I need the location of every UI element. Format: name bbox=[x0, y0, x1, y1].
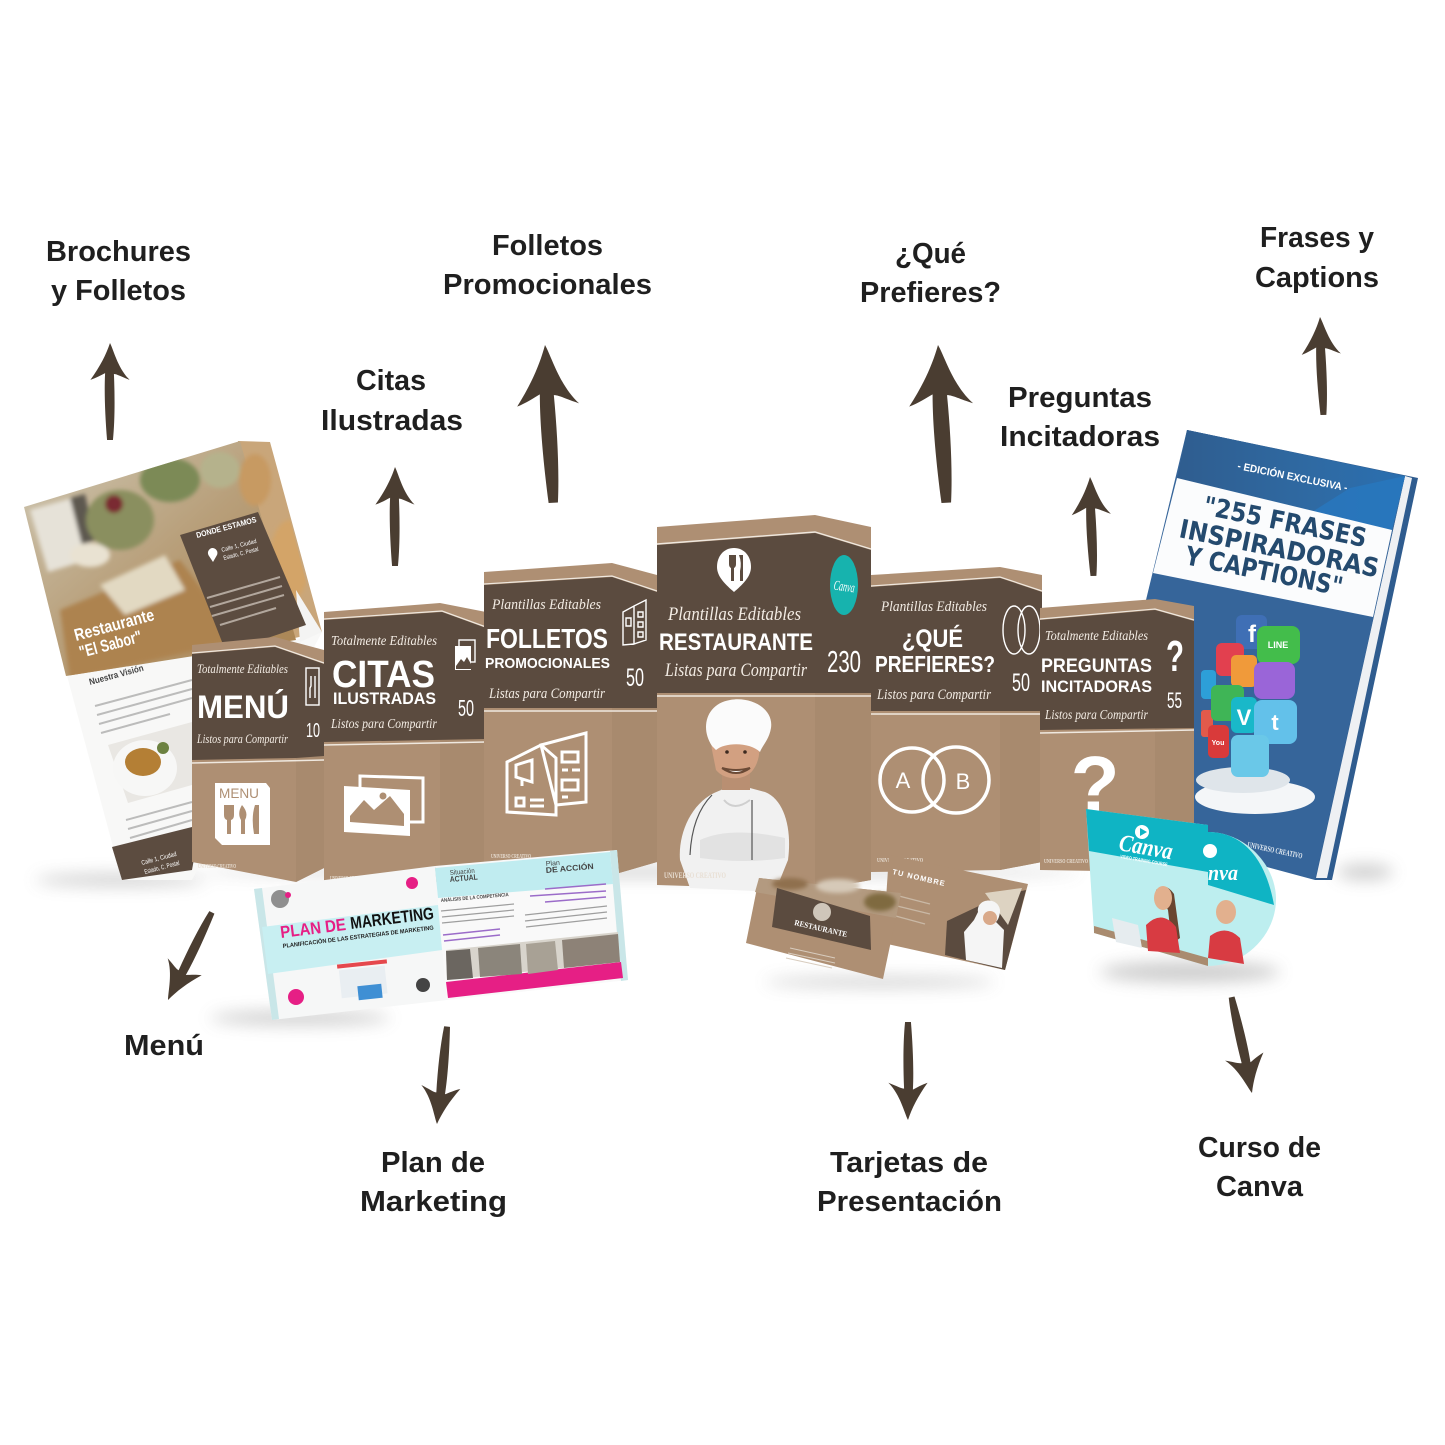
label: curso de canva: Canva bbox=[1216, 1171, 1304, 1203]
box: restaurante: Listas para Compartir bbox=[664, 660, 808, 681]
label: brochures y folletos: Brochures bbox=[46, 236, 191, 268]
icon: brochure bbox=[507, 733, 586, 815]
label: frases y captions: Frases y bbox=[1260, 222, 1374, 254]
box: folletos promocionales: PROMOCIONALES bbox=[485, 655, 610, 672]
brochure: Estado, C. Postal bbox=[223, 547, 259, 562]
label: menú: Menú bbox=[124, 1030, 204, 1062]
labels and arrows bbox=[46, 222, 1379, 1218]
box: citas ilustradas: Listos para Compartir bbox=[330, 717, 437, 732]
box: citas ilustradas: Totalmente Editables bbox=[331, 634, 437, 649]
canva course cd bbox=[1086, 809, 1276, 966]
label: plan de marketing bbox=[360, 1147, 507, 1218]
brochure: DONDE ESTAMOS bbox=[195, 515, 258, 540]
box: preguntas incitadoras: INCITADORAS bbox=[1041, 677, 1152, 696]
label: citas ilustradas bbox=[321, 365, 463, 437]
box: qué prefieres bbox=[871, 567, 1042, 872]
box: qué prefieres: PREFIERES? bbox=[875, 651, 995, 677]
marketing booklet: Plan bbox=[546, 860, 560, 868]
box: preguntas incitadoras: Listos para Compartir bbox=[1044, 708, 1148, 723]
arrow: tarjetas bbox=[888, 1022, 928, 1120]
box: folletos promocionales: Listas para Compartir bbox=[488, 686, 605, 702]
chef bbox=[680, 699, 789, 892]
brochure: Calle 1, Ciudad bbox=[221, 539, 257, 554]
arrow: frases bbox=[1300, 316, 1343, 416]
label: tarjetas de presentación bbox=[817, 1147, 1002, 1218]
arrow: folletos bbox=[514, 343, 584, 504]
icon: fork and knife pin bbox=[717, 548, 751, 592]
brochure: Restaurante bbox=[72, 605, 156, 645]
box: restaurante bbox=[657, 515, 871, 892]
social media icons: You bbox=[1212, 740, 1224, 747]
box: folletos promocionales: Plantillas Editables bbox=[491, 597, 601, 613]
box: menú: UNIVERSO CREATIVO bbox=[198, 864, 236, 870]
arrow: curso de canva bbox=[1212, 993, 1271, 1097]
marketing booklet: PLAN DE bbox=[279, 915, 347, 942]
arrow: plan de marketing bbox=[418, 1025, 467, 1126]
label: folletos promocionales bbox=[443, 230, 652, 301]
box: folletos promocionales: 50 bbox=[626, 664, 644, 692]
marketing booklet: MARKETING bbox=[349, 904, 435, 933]
box: preguntas incitadoras: UNIVERSO CREATIVO bbox=[1044, 859, 1088, 865]
box: qué prefieres: 50 bbox=[1012, 669, 1030, 697]
icon: A B circles: A bbox=[896, 768, 911, 793]
social media icons bbox=[1195, 615, 1315, 814]
book: 255 frases: INSPIRADORAS bbox=[1177, 514, 1382, 584]
box: qué prefieres: Plantillas Editables bbox=[880, 599, 987, 615]
arrow: brochures bbox=[90, 343, 130, 440]
brochure: Estado, C. Postal bbox=[144, 860, 181, 876]
business cards bbox=[746, 855, 1028, 979]
label: citas ilustradas: Ilustradas bbox=[321, 405, 463, 437]
brochure: Calle 1, Ciudad bbox=[141, 851, 178, 867]
icon: A B circles: B bbox=[956, 769, 970, 794]
box: folletos promocionales: FOLLETOS bbox=[486, 623, 608, 654]
box: menú: Totalmente Editables bbox=[197, 661, 288, 676]
icon: menu: MENU bbox=[219, 785, 259, 801]
label: preguntas incitadoras: Incitadoras bbox=[1000, 421, 1160, 453]
box: preguntas incitadoras bbox=[1040, 599, 1194, 872]
arrow: qué prefieres bbox=[906, 343, 978, 504]
social media icons: LINE bbox=[1268, 640, 1288, 650]
book: 255 frases: - EDICIÓN EXCLUSIVA - bbox=[1236, 459, 1349, 494]
label: citas ilustradas: Citas bbox=[356, 365, 426, 397]
label: plan de marketing: Marketing bbox=[360, 1186, 507, 1218]
marketing booklet bbox=[254, 850, 628, 1020]
label: plan de marketing: Plan de bbox=[381, 1147, 485, 1179]
box: qué prefieres: UNIVERSO CREATIVO bbox=[877, 858, 923, 864]
label: qué prefieres: ¿Qué bbox=[895, 238, 966, 270]
label: qué prefieres: Prefieres? bbox=[860, 277, 1001, 309]
box: preguntas incitadoras: 55 bbox=[1167, 688, 1182, 713]
icon: A B circles bbox=[880, 747, 989, 813]
canva course cd: Canva bbox=[1117, 830, 1175, 865]
box: citas ilustradas bbox=[324, 603, 486, 885]
label: frases y captions: Captions bbox=[1255, 262, 1379, 294]
label: curso de canva: Curso de bbox=[1198, 1132, 1321, 1164]
box: preguntas incitadoras: PREGUNTAS bbox=[1041, 656, 1152, 677]
icon: images bbox=[344, 776, 423, 836]
brochure: Nuestra Visión bbox=[88, 663, 145, 687]
marketing booklet: DE ACCIÓN bbox=[545, 862, 594, 875]
marketing booklet: Situación bbox=[450, 868, 475, 877]
canva course cd: nva bbox=[1208, 860, 1238, 885]
arrow: preguntas bbox=[1070, 476, 1113, 577]
book: 255 frases bbox=[1130, 430, 1418, 880]
label: frases y captions bbox=[1255, 222, 1379, 294]
marketing booklet: ACTUAL bbox=[449, 873, 478, 884]
canva course cd: VIDEO TRAINING COURSE bbox=[1120, 854, 1168, 868]
box: restaurante: UNIVERSO CREATIVO bbox=[664, 871, 726, 880]
box: restaurante: 230 bbox=[827, 644, 861, 679]
box: preguntas incitadoras: ? bbox=[1071, 740, 1119, 829]
label: qué prefieres bbox=[860, 238, 1001, 309]
label: brochures y folletos bbox=[46, 236, 191, 307]
label: folletos promocionales: Promocionales bbox=[443, 269, 652, 301]
social media icons: f bbox=[1248, 621, 1257, 648]
brochure bbox=[24, 441, 322, 880]
social media icons: V bbox=[1237, 705, 1252, 730]
marketing booklet: PLANIFICACIÓN DE LAS ESTRATEGIAS DE MARKETING bbox=[282, 923, 434, 950]
box: qué prefieres: ¿QUÉ bbox=[902, 624, 963, 653]
canva badge: Canva bbox=[833, 579, 856, 596]
label: curso de canva bbox=[1198, 1132, 1321, 1203]
business cards: RESTAURANTE bbox=[794, 918, 848, 939]
label: folletos promocionales: Folletos bbox=[492, 230, 603, 262]
label: preguntas incitadoras: Preguntas bbox=[1008, 382, 1152, 414]
social media icons: t bbox=[1271, 710, 1279, 735]
arrow: menú bbox=[151, 904, 229, 1009]
label: tarjetas de presentación: Presentación bbox=[817, 1186, 1002, 1218]
business cards: TU NOMBRE bbox=[892, 867, 947, 888]
ground shadows bbox=[35, 864, 1393, 1025]
canva badge bbox=[830, 555, 858, 615]
book: 255 frases: "255 FRASES bbox=[1201, 491, 1369, 554]
book: 255 frases: UNIVERSO CREATIVO bbox=[1247, 840, 1303, 861]
box: menú: MENÚ bbox=[197, 689, 289, 725]
box: folletos promocionales bbox=[484, 563, 657, 875]
label: brochures y folletos: y Folletos bbox=[51, 275, 186, 307]
box: citas ilustradas: ILUSTRADAS bbox=[333, 689, 436, 708]
box: restaurante: RESTAURANTE bbox=[659, 629, 813, 656]
book: 255 frases: Y CAPTIONS" bbox=[1182, 541, 1345, 603]
label: preguntas incitadoras bbox=[1000, 382, 1160, 453]
box: menú: 10 bbox=[306, 720, 320, 742]
label: tarjetas de presentación: Tarjetas de bbox=[830, 1147, 988, 1179]
box: qué prefieres: Listos para Compartir bbox=[876, 687, 991, 703]
box: citas ilustradas: UNIVERSO CREATIVO bbox=[330, 876, 368, 882]
box: restaurante: Plantillas Editables bbox=[667, 604, 801, 625]
box: preguntas incitadoras: Totalmente Editables bbox=[1045, 629, 1148, 644]
arrow: citas bbox=[375, 467, 415, 566]
brochure: "El Sabor" bbox=[77, 627, 144, 662]
icon: menu bbox=[215, 783, 270, 845]
box: citas ilustradas: 50 bbox=[458, 695, 474, 721]
box: menú bbox=[192, 637, 324, 882]
box: preguntas incitadoras: ? bbox=[1166, 632, 1184, 681]
marketing booklet: ANÁLISIS DE LA COMPETENCIA bbox=[441, 891, 509, 904]
box: folletos promocionales: UNIVERSO CREATIVO bbox=[491, 854, 531, 860]
box: menú: Listos para Compartir bbox=[196, 731, 289, 746]
box: citas ilustradas: CITAS bbox=[332, 654, 435, 696]
